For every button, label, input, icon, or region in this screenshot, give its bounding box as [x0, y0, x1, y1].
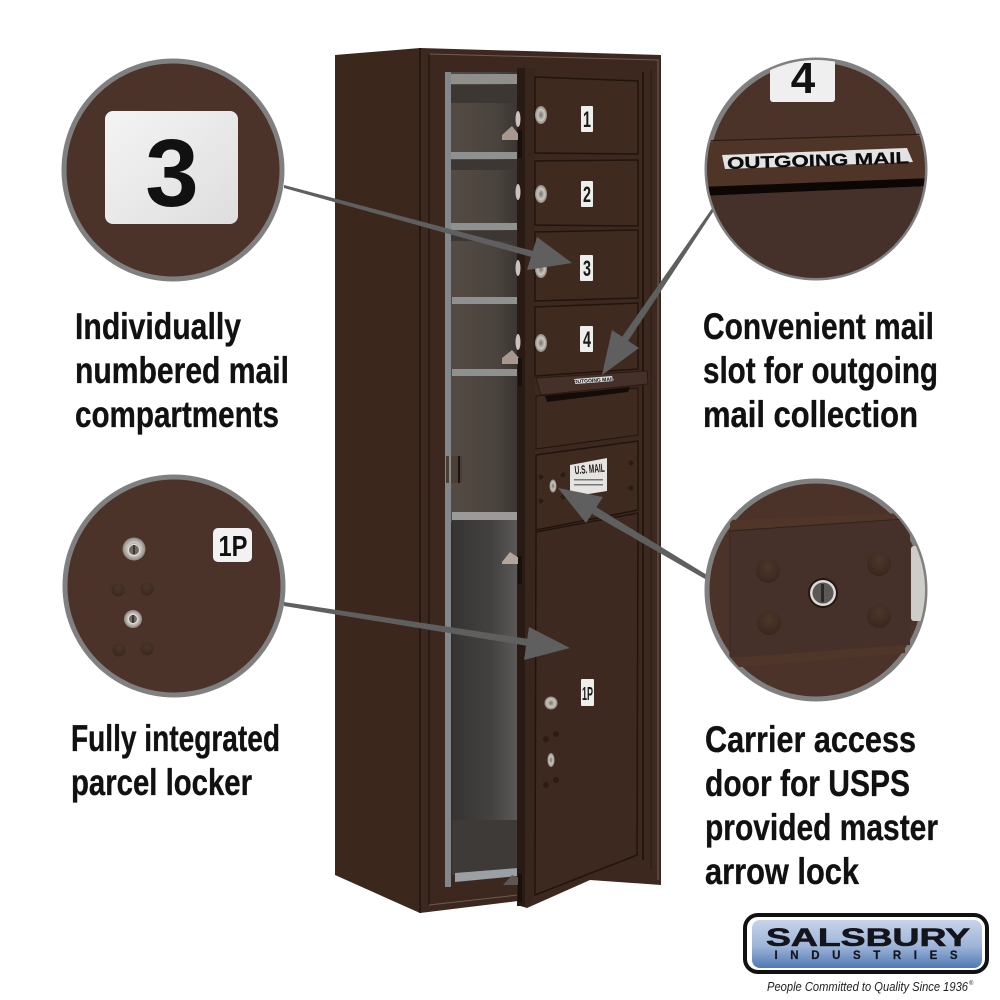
parcel locker door: 1P: [582, 684, 593, 704]
callout circle: carrier lock: [707, 481, 931, 699]
door panel: [730, 517, 910, 658]
caption: parcel locker: Fully integrated: [71, 718, 280, 759]
logo tagline: People Committed to Quality Since 1936: [767, 979, 969, 994]
compartment door 1: 1: [583, 107, 591, 132]
carrier access door: [536, 441, 638, 530]
tenant lock: [124, 610, 142, 628]
Salsbury Industries logo: [745, 915, 987, 994]
caption: numbered compartments: compartments: [75, 394, 279, 435]
arrow: parcel locker: [284, 602, 570, 660]
outgoing mail slot: [536, 371, 648, 449]
compartment door 4: [535, 303, 638, 376]
caption: outgoing mail slot: mail collection: [703, 394, 918, 435]
registered mark: ®: [969, 980, 974, 987]
logo wordmark: SALSBURY: [766, 924, 970, 952]
rivets: [112, 582, 154, 656]
caption: carrier access door: door for USPS: [705, 763, 910, 804]
arrow: outgoing mail slot: [602, 207, 715, 375]
caption: outgoing mail slot: slot for outgoing: [703, 350, 938, 391]
rivets: [756, 552, 891, 635]
parcel lock: [122, 538, 146, 560]
number plate 3: [105, 111, 238, 227]
compartment door 3: [535, 230, 638, 301]
caption: carrier access door: [705, 719, 938, 892]
mailbox cabinet: [335, 48, 661, 913]
caption: numbered compartments: [75, 306, 289, 435]
outgoing mail label: OUTGOING MAIL: [727, 149, 909, 173]
compartment door 4: 4: [583, 327, 591, 352]
parcel locker door: [535, 513, 638, 895]
door column frame: [642, 72, 644, 860]
caption: numbered compartments: numbered mail: [75, 350, 289, 391]
caption: parcel locker: [71, 718, 280, 803]
cabinet front frame: [420, 48, 661, 913]
arrow: numbered compartments: [284, 185, 572, 270]
callout circle: parcel locker: [65, 477, 283, 695]
callout circle: compartment number: [64, 61, 282, 279]
outgoing mail label: [722, 148, 913, 169]
open door edge: [502, 68, 535, 908]
cabinet side panel: [335, 48, 420, 913]
compartment door 3: 3: [583, 256, 591, 281]
number plate 3: 3: [145, 120, 199, 227]
outgoing mail slot: OUTGOING MAIL: [573, 377, 615, 385]
1P plate: 1P: [218, 531, 248, 563]
arrow: carrier access door: [558, 488, 707, 579]
carrier access door: U.S. MAIL: [574, 461, 605, 477]
caption: outgoing mail slot: Convenient mail: [703, 306, 934, 347]
compartment door 2: 2: [583, 182, 591, 207]
arrow lock: [808, 578, 838, 608]
caption: carrier access door: provided master: [705, 807, 938, 848]
U.S. Mail label edge: [911, 546, 925, 621]
logo subtitle: INDUSTRIES: [774, 950, 958, 962]
open compartment interior: [445, 72, 518, 887]
number plate 4: [770, 60, 835, 102]
caption: carrier access door: Carrier access: [705, 719, 916, 760]
number plate 4: 4: [791, 54, 816, 103]
compartment door 2: [535, 160, 638, 226]
caption: parcel locker: parcel locker: [71, 762, 252, 803]
callout circle: outgoing mail: [700, 50, 930, 290]
compartment door 1: [535, 77, 638, 154]
caption: numbered compartments: Individually: [75, 306, 241, 347]
caption: carrier access door: arrow lock: [705, 851, 859, 892]
caption: outgoing mail slot: [703, 306, 938, 435]
